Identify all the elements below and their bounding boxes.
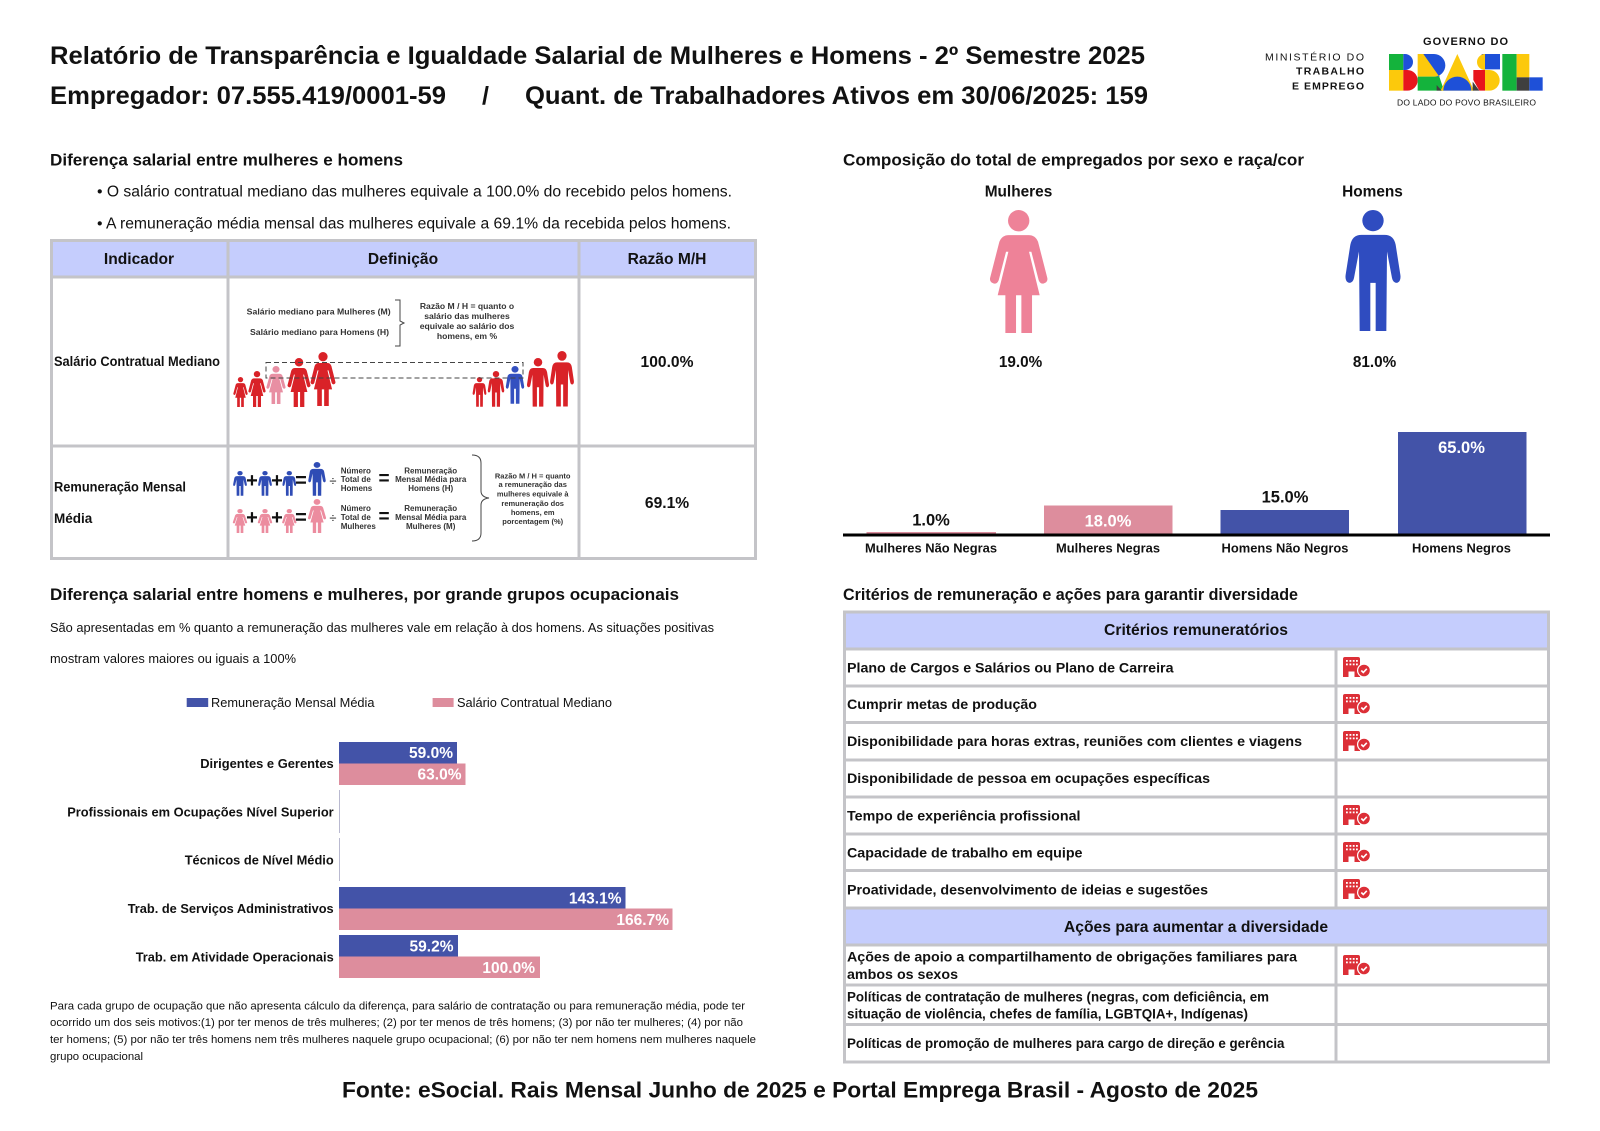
group: atividade operacionais: 59.2% xyxy=(410,938,454,956)
bar: homens não negros xyxy=(1220,488,1349,534)
row: equipe: Capacidade de trabalho em equipe xyxy=(847,846,1083,860)
table header: Razão M/H xyxy=(628,251,706,268)
header: critérios remuneratórios: Critérios remuneratórios xyxy=(1104,622,1288,639)
row label: salário contratual mediano: Salário Contratual Mediano xyxy=(54,354,220,369)
text block: explicação xyxy=(50,621,714,666)
diagram: remuneração média: Razão M / H = quanto xyxy=(495,472,571,480)
diagram: remuneração média: ÷ xyxy=(329,474,337,488)
diagram: salário mediano: equivale ao salário dos xyxy=(420,321,515,331)
group: serviços administrativos xyxy=(128,887,672,930)
diagram: remuneração média: + xyxy=(271,507,283,529)
diagram: remuneração média: + xyxy=(246,470,258,492)
source: Fonte: eSocial. Rais Mensal Junho de 2025 e Portal Emprega Brasil - Agosto de 2025 xyxy=(342,1078,1258,1102)
diagram: remuneração média: remuneração dos xyxy=(501,499,564,508)
bar chart: sexo e raça xyxy=(843,432,1550,556)
legend xyxy=(187,695,612,710)
icon: homem xyxy=(1345,210,1401,331)
row value: 100.0%: 100.0% xyxy=(641,354,694,371)
logo: ministério xyxy=(1265,50,1364,93)
diagram: salário mediano xyxy=(233,300,574,407)
heading: composição: Composição do total de empregados por sexo e raça/cor xyxy=(843,152,1305,170)
row: experiência: Tempo de experiência profissional xyxy=(847,808,1080,824)
bullet: remuneração média: • A remuneração média mensal das mulheres equivale a 69.1% da recebida pelos homens. xyxy=(97,216,731,232)
row: promoção: Políticas de promoção de mulheres para cargo de direção e gerência xyxy=(847,1036,1285,1051)
icon: building check xyxy=(1343,879,1371,900)
axis labels xyxy=(865,540,1511,556)
row label: remuneração mensal média: Média xyxy=(54,511,93,526)
footnote: Para cada grupo de ocupação que não apresenta cálculo da diferença, para salário de contratação ou para remuneração média, pode ter xyxy=(50,1000,745,1012)
diagram: remuneração média xyxy=(233,455,571,541)
heading: grupos ocupacionais: Diferença salarial entre homens e mulheres, por grande grupos ocupacionais xyxy=(50,586,679,604)
row: contratação xyxy=(847,990,1269,1022)
row label: remuneração mensal média xyxy=(54,480,186,526)
diagram: remuneração média: = xyxy=(295,470,307,492)
group: dirigentes e gerentes: 59.0% xyxy=(409,745,453,762)
header: ações: Ações para aumentar a diversidade xyxy=(1064,919,1328,936)
title: Quant. de Trabalhadores Ativos em 30/06/2025: 159 xyxy=(525,82,1148,110)
icon: building check xyxy=(1343,657,1371,678)
axis labels: Homens Negros xyxy=(1412,540,1511,556)
row: compartilhamento: ambos os sexos xyxy=(847,967,958,982)
diagram: salário mediano: salário das mulheres xyxy=(424,311,510,321)
bar chart: grupos ocupacionais xyxy=(67,742,672,978)
diagram: remuneração média: Remuneração xyxy=(404,466,457,476)
icon: building check xyxy=(1343,731,1371,752)
row: contratação: situação de violência, chefes de família, LGBTQIA+, Indígenas) xyxy=(847,1006,1248,1022)
row label: remuneração mensal média: Remuneração Mensal xyxy=(54,480,186,494)
bar: mulheres negras xyxy=(1044,506,1172,534)
icon: mulher xyxy=(990,210,1047,333)
title: Empregador: 07.555.419/0001-59 xyxy=(50,82,446,110)
group: serviços administrativos: Trab. de Serviços Administrativos xyxy=(128,901,334,916)
row: proatividade: Proatividade, desenvolvimento de ideias e sugestões xyxy=(847,882,1208,898)
panel: tabela critérios xyxy=(844,612,1549,1062)
diagram: remuneração média: + xyxy=(246,507,258,529)
group: atividade operacionais: 100.0% xyxy=(482,960,535,977)
logo: ministério: MINISTÉRIO DO xyxy=(1265,50,1364,63)
row: contratação: Políticas de contratação de mulheres (negras, com deficiência, em xyxy=(847,990,1269,1004)
bar: mulheres não negras xyxy=(866,512,996,535)
diagram: remuneração média: Total de xyxy=(341,513,371,522)
label: homens: Homens xyxy=(1342,184,1403,200)
bar: mulheres negras: 18.0% xyxy=(1085,512,1132,530)
footnote xyxy=(50,1000,756,1063)
heading: diferença salarial: Diferença salarial entre mulheres e homens xyxy=(50,152,403,170)
group: profissionais nível superior: Profissionais em Ocupações Nível Superior xyxy=(67,804,334,820)
logo: governo do brasil: DO LADO DO POVO BRASILEIRO xyxy=(1397,97,1536,107)
footnote: ter homens; (5) por não ter três homens nem três mulheres naquele grupo ocupacional; (6) por não ter nem homens nem mulheres naquele xyxy=(50,1034,756,1046)
row: plano de cargos: Plano de Cargos e Salários ou Plano de Carreira xyxy=(847,660,1174,676)
row: compartilhamento: Ações de apoio a compartilhamento de obrigações familiares para xyxy=(847,950,1298,964)
diagram: remuneração média: Mensal Média para xyxy=(395,513,467,522)
group: serviços administrativos: 143.1% xyxy=(569,890,622,908)
diagram: remuneração média: Total de xyxy=(341,475,371,484)
text block: explicação: São apresentadas em % quanto a remuneração das mulheres vale em relação à dos homens. As situações positivas xyxy=(50,621,714,635)
group: atividade operacionais: Trab. em Atividade Operacionais xyxy=(136,950,334,964)
diagram: remuneração média: porcentagem (%) xyxy=(502,517,564,526)
diagram: salário mediano: Salário mediano para Homens (H) xyxy=(250,327,389,337)
icon: building check xyxy=(1343,842,1371,862)
row value: 69.1%: 69.1% xyxy=(645,495,689,512)
diagram: salário mediano: Salário mediano para Mulheres (M) xyxy=(247,307,391,317)
group: técnicos nível médio: Técnicos de Nível Médio xyxy=(185,852,334,868)
logo: governo do brasil: GOVERNO DO xyxy=(1423,36,1508,48)
diagram: remuneração média: = xyxy=(378,468,390,490)
logo: governo do brasil xyxy=(1389,36,1543,107)
title: Relatório de Transparência e Igualdade Salarial de Mulheres e Homens - 2º Semestre 2025 xyxy=(50,42,1145,70)
group: atividade operacionais xyxy=(136,935,540,978)
diagram: remuneração média: Número xyxy=(341,504,371,513)
title: / xyxy=(482,82,489,110)
diagram: remuneração média: Mensal Média para xyxy=(395,475,467,484)
axis labels: Mulheres Negras xyxy=(1056,540,1160,556)
diagram: remuneração média: Homens (H) xyxy=(408,484,453,493)
panel: tabela indicador xyxy=(51,240,756,559)
row: compartilhamento xyxy=(847,950,1298,982)
diagram: remuneração média: homens, em xyxy=(511,508,555,517)
axis labels: Homens Não Negros xyxy=(1222,540,1348,556)
label: mulheres: Mulheres xyxy=(985,184,1052,200)
diagram: remuneração média: Remuneração xyxy=(404,504,457,513)
text block: explicação: mostram valores maiores ou iguais a 100% xyxy=(50,652,296,666)
footnote: ocorrido um dos seis motivos:(1) por ter menos de três mulheres; (2) por ter menos de três homens; (3) por não ter mulheres; (4) por não xyxy=(50,1017,743,1029)
row: horas extras: Disponibilidade para horas extras, reuniões com clientes e viagens xyxy=(847,734,1302,749)
diagram: remuneração média: Mulheres xyxy=(341,522,376,531)
table header: Indicador xyxy=(104,251,174,268)
diagram: remuneração média: ÷ xyxy=(329,510,337,526)
legend: Salário Contratual Mediano xyxy=(457,695,612,710)
group: dirigentes e gerentes xyxy=(200,742,466,785)
axis labels: Mulheres Não Negras xyxy=(865,540,997,556)
bar: homens negros xyxy=(1398,432,1526,534)
diagram: remuneração média: + xyxy=(271,470,283,492)
icon: building check xyxy=(1343,694,1371,714)
diagram: remuneração média: Homens xyxy=(341,484,373,493)
icon: building check xyxy=(1343,955,1371,976)
bar: homens negros: 65.0% xyxy=(1438,439,1485,457)
group: serviços administrativos: 166.7% xyxy=(616,912,669,929)
value: 81.0%: 81.0% xyxy=(1353,354,1397,371)
logo: ministério: E EMPREGO xyxy=(1292,81,1364,93)
diagram: remuneração média: Mulheres (M) xyxy=(406,522,456,531)
table header: Definição xyxy=(368,251,438,268)
diagram: remuneração média: mulheres equivale à xyxy=(497,490,569,498)
row: metas: Cumprir metas de produção xyxy=(847,697,1037,712)
diagram: salário mediano: homens, em % xyxy=(437,331,497,341)
diagram: remuneração média: Número xyxy=(341,466,371,476)
bullet: salário contratual: • O salário contratual mediano das mulheres equivale a 100.0% do recebido pelos homens. xyxy=(97,184,732,200)
logo: ministério: TRABALHO xyxy=(1296,66,1364,78)
bar: homens não negros: 15.0% xyxy=(1262,488,1309,506)
value: 19.0%: 19.0% xyxy=(999,354,1043,371)
diagram: remuneração média: = xyxy=(295,507,307,529)
footnote: grupo ocupacional xyxy=(50,1051,143,1063)
diagram: remuneração média: = xyxy=(378,506,390,528)
group: dirigentes e gerentes: 63.0% xyxy=(418,766,462,784)
table header xyxy=(104,251,706,268)
diagram: remuneração média: a remuneração das xyxy=(499,480,567,489)
group: dirigentes e gerentes: Dirigentes e Gerentes xyxy=(200,756,334,771)
row: ocupações específicas: Disponibilidade de pessoa em ocupações específicas xyxy=(847,771,1210,786)
legend: Remuneração Mensal Média xyxy=(211,695,375,710)
icon: building check xyxy=(1343,805,1371,826)
heading: critérios: Critérios de remuneração e ações para garantir diversidade xyxy=(843,586,1298,604)
bar: mulheres não negras: 1.0% xyxy=(912,512,950,530)
diagram: salário mediano: Razão M / H = quanto o xyxy=(420,301,514,311)
title xyxy=(50,42,1148,110)
